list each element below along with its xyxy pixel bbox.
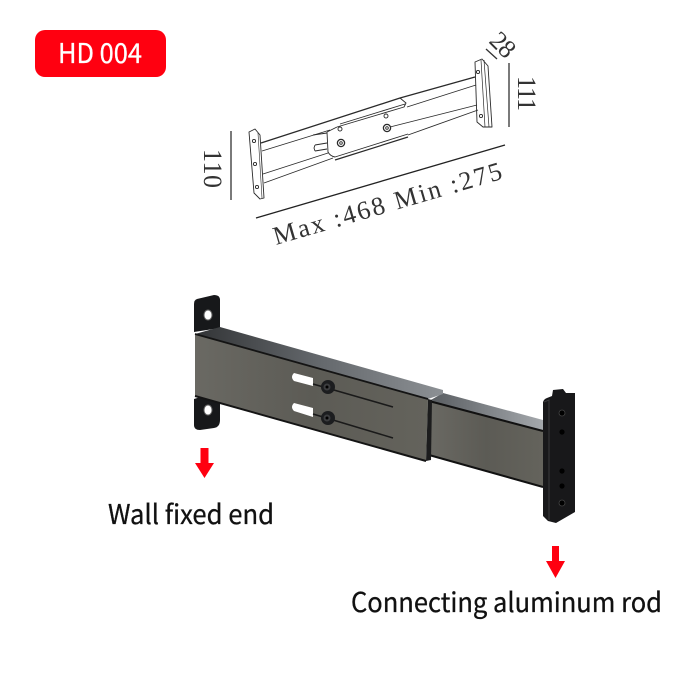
- upper slot and bolt: [292, 373, 313, 386]
- sliding sleeve: [337, 98, 406, 127]
- wall plate top tab: [194, 295, 220, 332]
- product photo: telescopic bracket: [194, 295, 575, 523]
- narrow tube top face: [429, 393, 543, 431]
- badge: HD 004: HD 004: [58, 32, 142, 71]
- rails: [261, 77, 475, 143]
- dimension: Max 468 Min 275: Max :468 Min :275: [270, 156, 505, 251]
- dimension: 111: [509, 63, 541, 127]
- badge: HD 004: [35, 30, 166, 77]
- line drawing: bracket technical diagram: [249, 59, 492, 199]
- dimension: 111: 111: [512, 76, 541, 111]
- end plate: [543, 389, 575, 523]
- lower slot and bolt: [292, 403, 313, 417]
- narrow tube front face: [429, 401, 543, 487]
- left plate outline: [249, 129, 264, 199]
- dimension: 110: 110: [198, 149, 227, 188]
- wall plate bottom tab: [194, 391, 220, 430]
- outer sleeve front face: [195, 334, 428, 461]
- sleeve bolts: [337, 139, 345, 147]
- label: connecting aluminum rod: Connecting aluminum rod: [351, 581, 662, 620]
- right plate outline: [475, 59, 492, 127]
- arrow: connecting aluminum rod: [546, 546, 565, 578]
- label: wall fixed end: Wall fixed end: [108, 493, 274, 532]
- dimension: 110: [198, 131, 231, 200]
- arrow: wall fixed end: [195, 448, 214, 478]
- outer sleeve top face: [195, 327, 443, 399]
- dimension: 28: 28: [484, 26, 522, 64]
